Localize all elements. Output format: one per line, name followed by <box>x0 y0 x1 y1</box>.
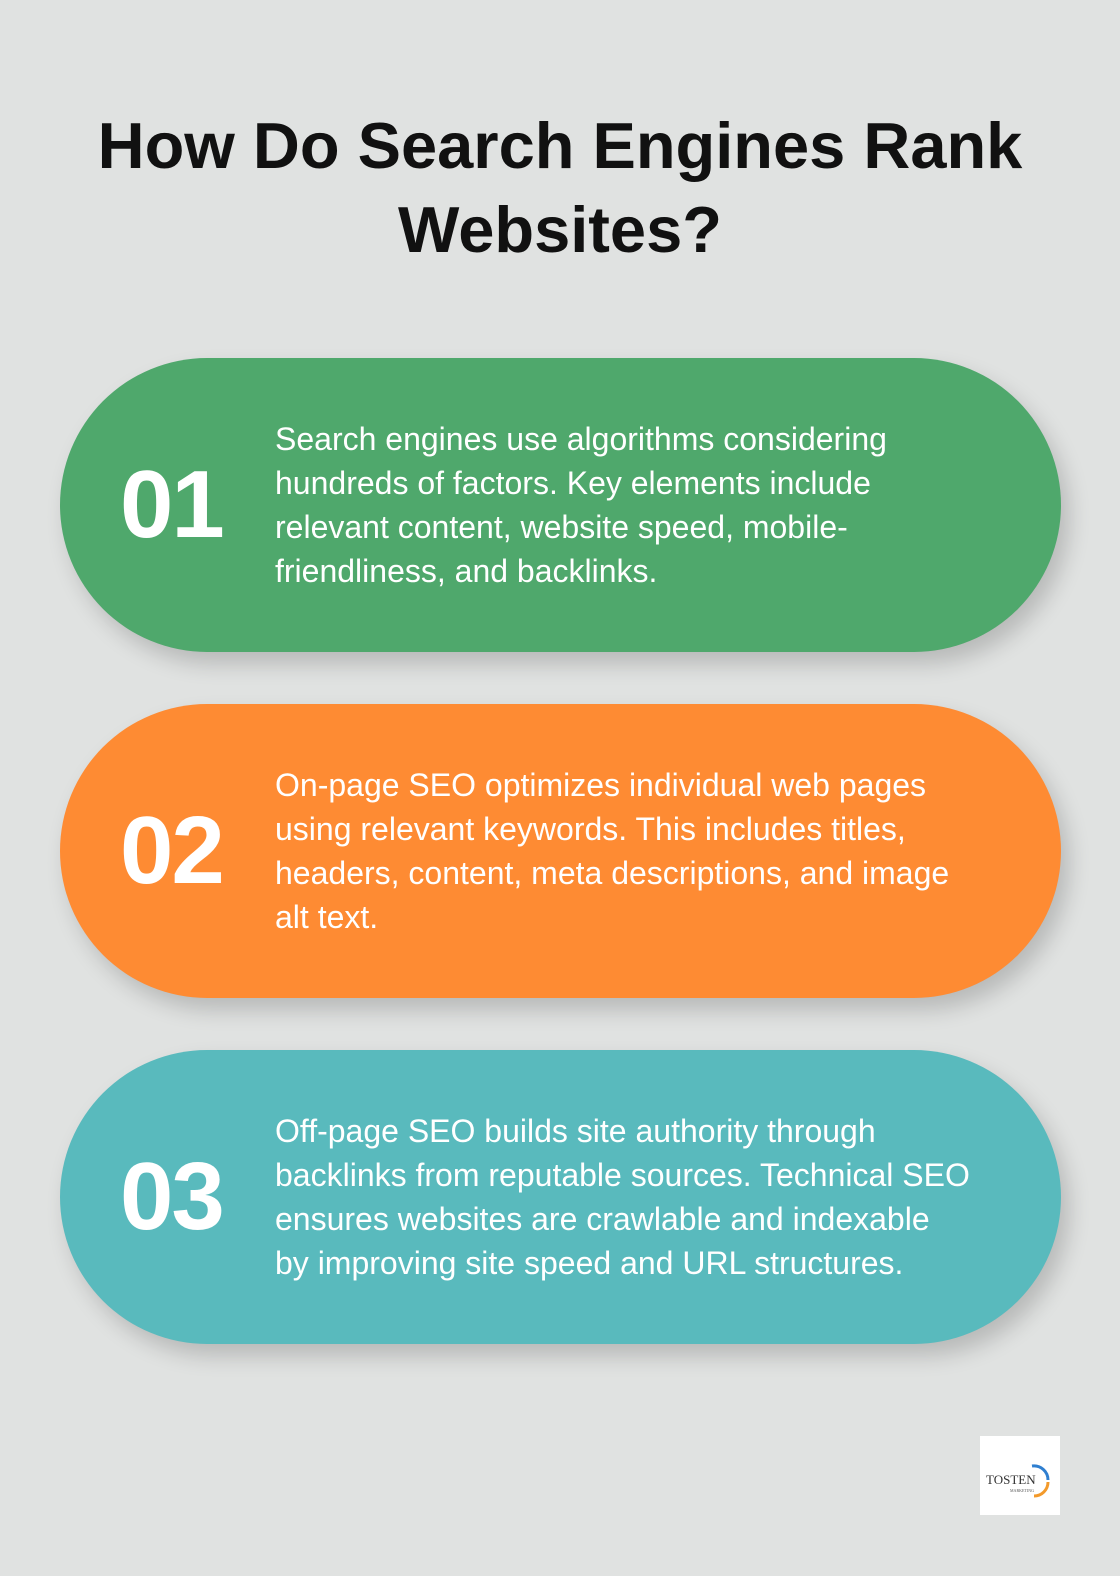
text 01 <box>275 421 887 589</box>
number 02: 02 <box>120 797 223 904</box>
logo: MARKETING <box>1010 1488 1034 1493</box>
number 03: 03 <box>120 1143 223 1250</box>
title <box>98 109 1022 266</box>
text 01: friendliness, and backlinks. <box>275 553 657 589</box>
text 02 <box>275 767 949 935</box>
text 01: Search engines use algorithms considering <box>275 421 887 457</box>
text 03 <box>275 1113 970 1281</box>
text 03: backlinks from reputable sources. Technical SEO <box>275 1157 970 1193</box>
title: Websites? <box>398 193 722 266</box>
text 03: Off-page SEO builds site authority through <box>275 1113 876 1149</box>
text 03: ensures websites are crawlable and indexable <box>275 1201 930 1237</box>
text 02: headers, content, meta descriptions, and image <box>275 855 949 891</box>
text 02: using relevant keywords. This includes titles, <box>275 811 906 847</box>
number 01: 01 <box>120 451 223 558</box>
logo: TOSTEN <box>986 1472 1036 1487</box>
text 02: On-page SEO optimizes individual web pages <box>275 767 926 803</box>
text 02: alt text. <box>275 899 378 935</box>
panel: step 03 <box>60 1050 1061 1344</box>
text 03: by improving site speed and URL structures. <box>275 1245 903 1281</box>
title: How Do Search Engines Rank <box>98 109 1022 182</box>
panel: step 01 <box>60 358 1061 652</box>
logo <box>980 1436 1060 1515</box>
text 01: relevant content, website speed, mobile- <box>275 509 848 545</box>
panel: step 02 <box>60 704 1061 998</box>
text 01: hundreds of factors. Key elements include <box>275 465 871 501</box>
